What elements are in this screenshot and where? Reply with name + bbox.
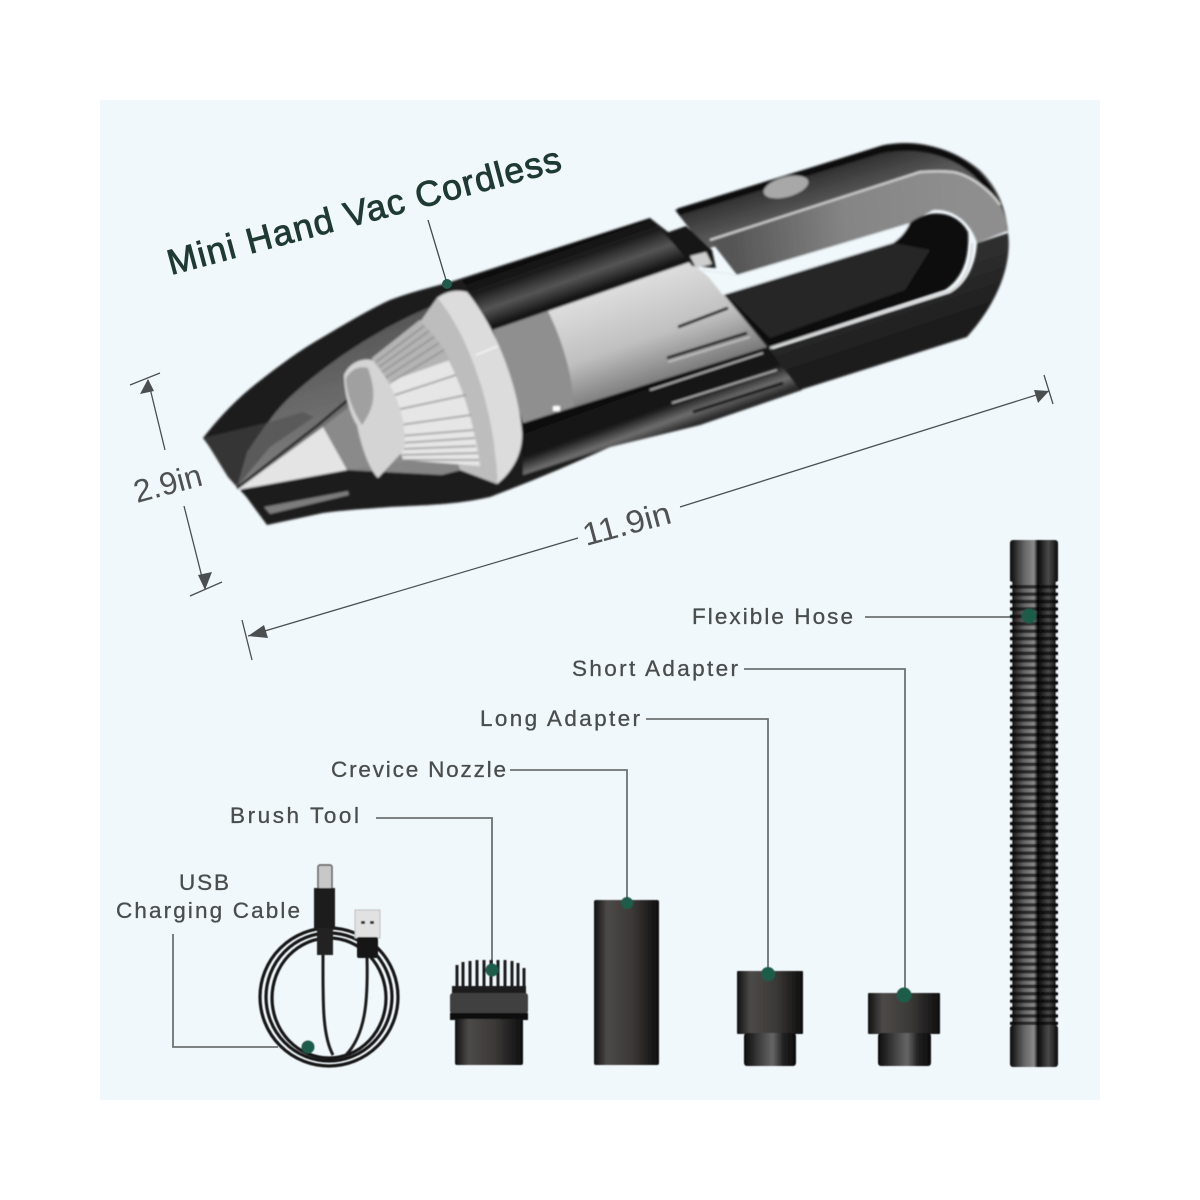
handle opening background xyxy=(703,213,968,347)
label: usb charging cable: USB xyxy=(179,870,229,895)
handle top band xyxy=(675,143,1008,248)
dc plug strain relief xyxy=(317,928,333,955)
handle slit xyxy=(703,223,910,295)
filter pleats xyxy=(376,326,479,460)
brush neck xyxy=(455,1019,523,1065)
upper pleat shade xyxy=(372,320,450,384)
lower body band xyxy=(523,347,800,475)
nose triangle xyxy=(204,412,314,487)
darker cylinder section xyxy=(493,311,574,423)
handle silver arm xyxy=(710,171,1007,275)
product: handheld vacuum xyxy=(203,143,1009,525)
brush tool xyxy=(450,960,528,1065)
small highlight xyxy=(553,406,560,411)
label: crevice nozzle: Crevice Nozzle xyxy=(331,757,506,782)
dimension: height 2.9in: 2.9in xyxy=(129,457,206,510)
dark seam xyxy=(237,385,366,488)
inner grip shade xyxy=(727,243,930,338)
label: usb charging cable: Charging Cable xyxy=(116,898,300,923)
dimension: length 11.9in: 11.9in xyxy=(578,495,675,553)
ring highlight xyxy=(476,346,498,355)
crevice nozzle xyxy=(594,897,659,1065)
collar inner xyxy=(346,367,373,425)
label: flexible hose: Flexible Hose xyxy=(692,604,853,629)
label: short adapter: Short Adapter xyxy=(572,656,738,681)
dimension: length 11.9in xyxy=(242,375,1053,660)
arm top highlight xyxy=(710,171,1000,240)
usb charging cable xyxy=(260,865,398,1066)
pleated filter xyxy=(372,320,480,466)
handle outer rim xyxy=(678,147,1004,228)
cable coil xyxy=(260,928,398,1066)
hose bottom cuff xyxy=(1010,1025,1058,1067)
neck connector xyxy=(690,252,712,268)
nose interior xyxy=(237,307,500,490)
translucent ring xyxy=(437,291,522,484)
nose lower reflection xyxy=(264,491,349,514)
bristles xyxy=(457,960,524,990)
collar shadow xyxy=(450,1013,528,1020)
central grey cylinder xyxy=(493,262,767,423)
filter collar xyxy=(344,360,405,478)
usb head holes xyxy=(361,921,374,924)
power button xyxy=(761,171,811,203)
cone tip xyxy=(237,427,347,490)
label: brush tool xyxy=(230,803,492,970)
dimension: height 2.9in xyxy=(129,373,222,596)
rib notches xyxy=(1009,582,1012,1026)
usb plug body xyxy=(357,937,378,958)
dark neck xyxy=(666,226,716,268)
label: short adapter xyxy=(572,656,905,995)
upper body band xyxy=(462,218,690,330)
long adapter xyxy=(737,967,803,1066)
vent highlights xyxy=(650,337,777,403)
label: long adapter: Long Adapter xyxy=(480,706,640,731)
title: Mini Hand Vac Cordless xyxy=(163,139,565,283)
vent slots xyxy=(650,308,783,412)
usb wire xyxy=(345,958,367,1056)
title leader xyxy=(428,220,452,289)
translucent pocket behind filter xyxy=(420,298,497,484)
label: usb charging cable xyxy=(116,870,300,1047)
dc plug body xyxy=(314,888,335,929)
lower grip xyxy=(770,233,1009,390)
filter body xyxy=(372,320,480,466)
label: brush tool: Brush Tool xyxy=(230,803,359,828)
brush shoulder xyxy=(452,986,526,994)
brush collar xyxy=(450,993,528,1014)
vacuum body shell xyxy=(203,218,802,525)
background panel xyxy=(100,100,1100,1100)
short adapter xyxy=(868,988,940,1066)
label: long adapter xyxy=(480,706,768,972)
label: crevice nozzle xyxy=(331,757,627,902)
usb metal head xyxy=(355,910,380,938)
nose triangle shadow xyxy=(204,423,267,487)
dc wire xyxy=(323,955,333,1055)
cone base xyxy=(323,389,404,470)
nose lower stripe xyxy=(240,470,500,520)
flexible hose xyxy=(1009,540,1059,1067)
grip silver line xyxy=(770,243,972,348)
hose ribbed section xyxy=(1010,582,1058,1026)
hose top cuff xyxy=(1010,540,1058,583)
dc plug tip xyxy=(318,865,332,889)
